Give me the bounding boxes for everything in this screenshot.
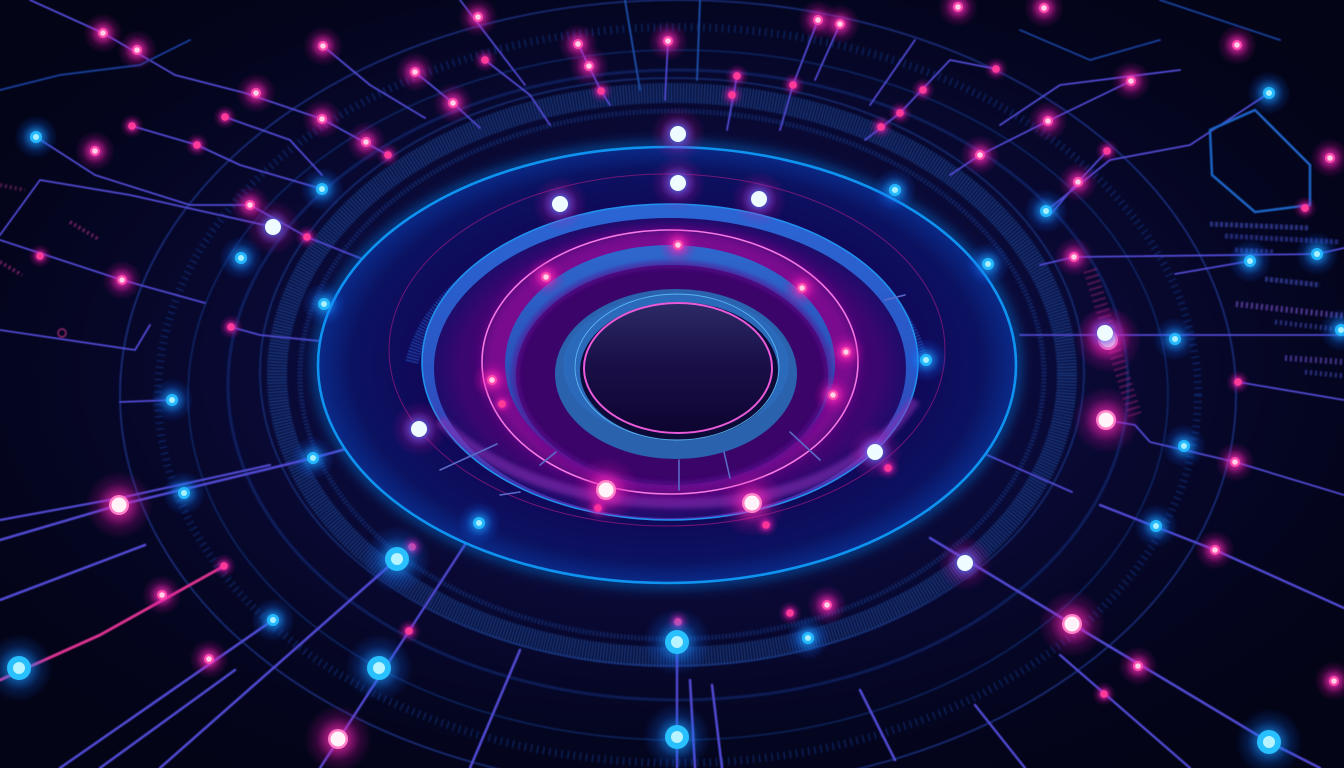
large pink nodes — [85, 306, 1142, 768]
large blue ring — [318, 147, 1016, 583]
inner blue ring band — [505, 245, 835, 485]
central dark disc — [584, 303, 772, 433]
core ring — [555, 289, 797, 459]
middle blue ring band — [422, 204, 918, 520]
blurred text blocks right — [0, 185, 1344, 415]
white-hot nodes — [245, 106, 1133, 591]
magenta ring — [482, 230, 858, 494]
radial tick marks — [440, 295, 905, 495]
ring glow layer — [318, 147, 1016, 583]
